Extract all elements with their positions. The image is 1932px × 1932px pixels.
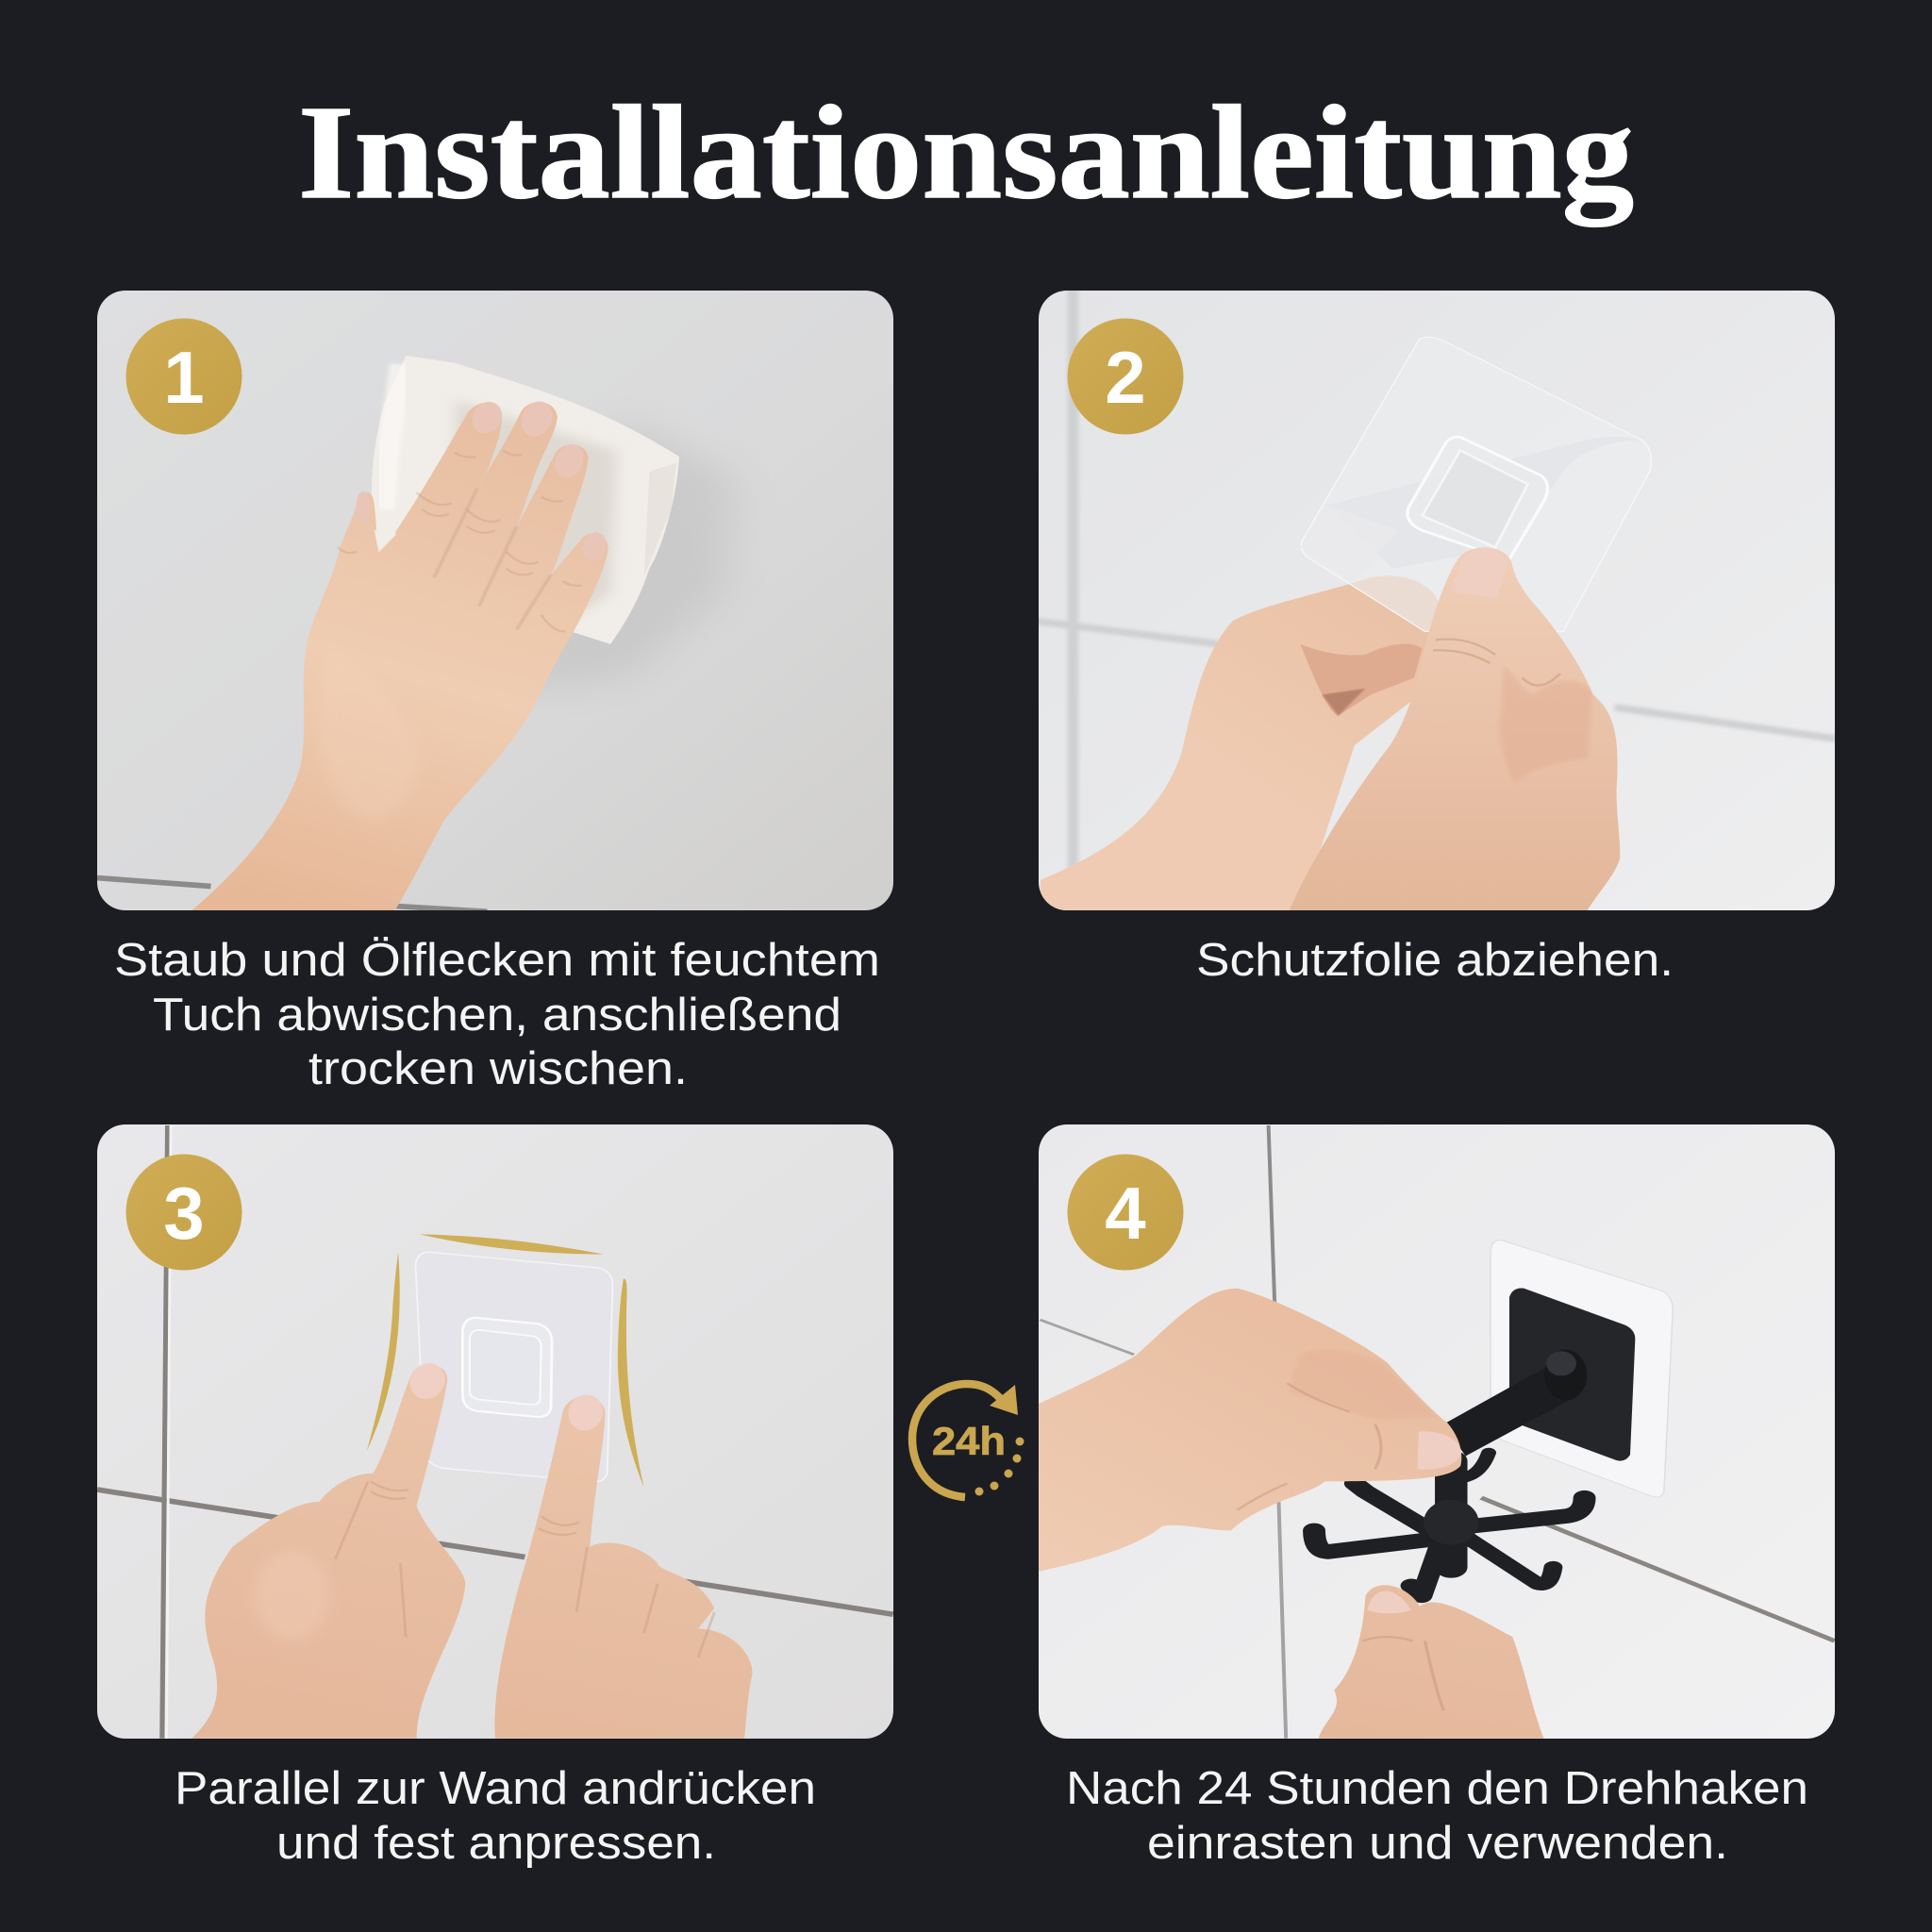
caption: step 1: Tuch abwischen, anschließend (153, 990, 841, 1041)
step badge 1: 1 (163, 336, 205, 419)
icon: hand wiping (192, 399, 608, 910)
caption: step 2: Schutzfolie abziehen. (1196, 935, 1674, 986)
tile highlights (166, 1125, 171, 1739)
icon: 24h timer (912, 1384, 1024, 1497)
panel: step 3 pressing pad (97, 1124, 893, 1739)
panel: step 4 hook (1039, 1124, 1835, 1739)
caption: step 3: Parallel zur Wand andrücken (175, 1763, 816, 1814)
thumbnail (1453, 547, 1507, 599)
pad centre square (1407, 437, 1547, 560)
caption: step 3 (175, 1763, 816, 1869)
icon: 24h timer: 24h (932, 1419, 1006, 1463)
tile grout lines (97, 1125, 893, 1739)
panel: step 2 peeling film (1035, 286, 1837, 910)
step badge 2 (1068, 319, 1183, 434)
step badge 4: 4 (1105, 1172, 1146, 1255)
step badge 3: 3 (163, 1172, 205, 1255)
icon: rotating hook (1314, 1350, 1587, 1596)
icon: large hand (1039, 1289, 1461, 1572)
step badge 4 (1068, 1155, 1183, 1270)
transparent adhesive pad (1300, 337, 1651, 631)
icon: left hand (1041, 576, 1441, 910)
icon: small hand (1319, 1585, 1543, 1739)
caption: step 1: Staub und Ölflecken mit feuchtem (114, 935, 880, 986)
blurred tile grout (1035, 286, 1837, 872)
caption: step 1: trocken wischen. (308, 1043, 688, 1094)
icon: black wall plate (1509, 1288, 1635, 1461)
transparent adhesive pad (415, 1252, 612, 1482)
gold pressure arcs (367, 1234, 644, 1488)
tile grout line (97, 878, 487, 911)
step badge 3 (126, 1155, 242, 1270)
caption: step 4 (1066, 1763, 1808, 1869)
icon: left hand (192, 1361, 465, 1739)
icon: cleaning cloth (372, 356, 679, 644)
caption: step 1 (114, 935, 880, 1094)
fingernails (356, 399, 608, 562)
cloth shadow (545, 432, 732, 686)
skin creases (1433, 640, 1560, 685)
step badge 1 (126, 319, 242, 434)
step badge 2: 2 (1105, 336, 1146, 419)
icon: right hand (494, 1393, 753, 1739)
tile grout lines (1041, 1125, 1835, 1739)
caption: step 3: und fest anpressen. (276, 1818, 716, 1869)
thumbnail (1417, 1431, 1461, 1470)
knuckle creases (338, 450, 582, 631)
panel: step 1 cleaning (97, 291, 893, 911)
caption: step 4: einrasten und verwenden. (1147, 1818, 1728, 1869)
transparent adhesive pad (1491, 1241, 1673, 1497)
title: Installationsanleitung (298, 77, 1634, 226)
caption: step 4: Nach 24 Stunden den Drehhaken (1066, 1763, 1808, 1814)
icon: right hand (1290, 547, 1620, 910)
